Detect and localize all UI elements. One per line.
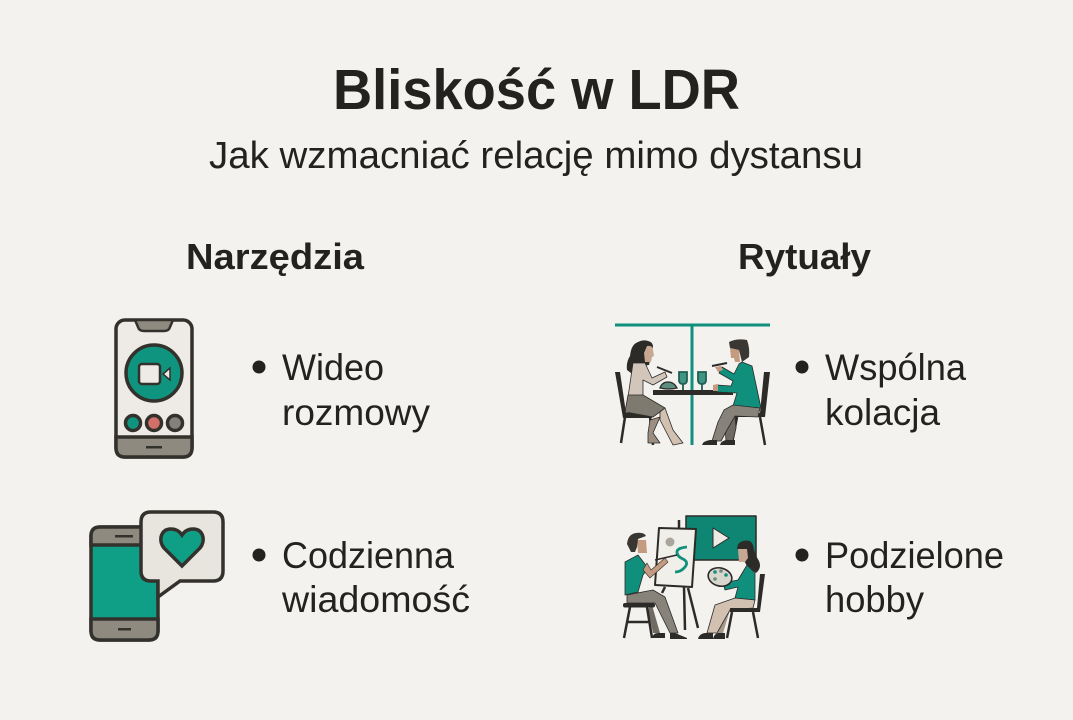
icon: phone with video call <box>116 320 192 457</box>
list item: Codzienna wiadomość <box>252 535 470 620</box>
icon: phone with heart message <box>91 512 223 640</box>
heading: Rytuały: Rytuały <box>738 236 871 277</box>
heading: Narzędzia: Narzędzia <box>186 236 365 277</box>
table <box>653 390 733 395</box>
list item: Wspólna kolacja: kolacja <box>825 392 940 433</box>
list item: Codzienna wiadomość: Codzienna <box>282 535 454 576</box>
list item: Codzienna wiadomość: wiadomość <box>281 579 470 620</box>
woman <box>615 340 683 445</box>
list item: Podzielone hobby: hobby <box>825 579 924 620</box>
wine glasses <box>679 372 706 390</box>
canvas <box>655 528 696 587</box>
plate <box>660 382 677 389</box>
title: Bliskość w LDR <box>333 58 740 122</box>
painter <box>623 533 687 639</box>
easel <box>662 520 698 630</box>
list item: Wspólna kolacja: Wspólna <box>825 347 966 388</box>
man <box>702 339 770 445</box>
icon: shared dinner <box>615 325 770 445</box>
subtitle: Jak wzmacniać relację mimo dystansu <box>209 135 863 177</box>
list item: Wideo rozmowy <box>252 347 430 433</box>
list item: Podzielone hobby: Podzielone <box>825 535 1004 576</box>
list item: Podzielone hobby <box>796 535 1004 620</box>
list item: Wideo rozmowy: Wideo <box>282 347 384 388</box>
list item: Wspólna kolacja <box>796 347 966 433</box>
icon: shared hobby <box>623 516 765 639</box>
video screen <box>686 516 756 560</box>
list item: Wideo rozmowy: rozmowy <box>282 392 430 433</box>
painter partner <box>698 540 765 639</box>
